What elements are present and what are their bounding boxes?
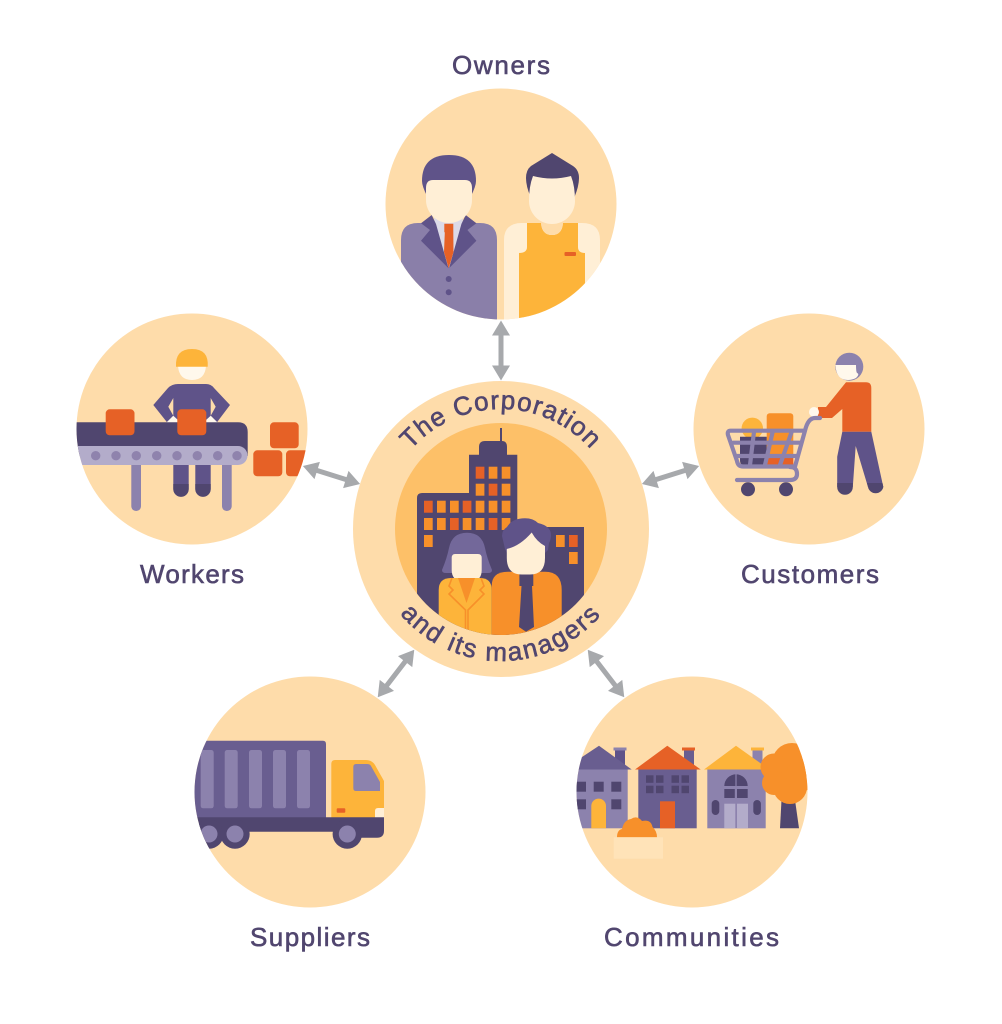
icon: two owners — [401, 153, 600, 325]
panel: customers — [694, 314, 924, 589]
curved heading: and its managers: and its managers — [402, 607, 599, 662]
panel: owners — [386, 50, 616, 325]
curved heading: The Corporation: The Corporation — [398, 394, 598, 448]
icon: office buildings and managers — [417, 428, 584, 640]
label: Communities: Communities — [604, 922, 779, 952]
arrow: suppliers to corporation — [371, 644, 421, 703]
panel: workers — [70, 314, 315, 589]
arrow: workers to corporation — [300, 457, 363, 493]
icon: shopper with cart — [728, 353, 883, 496]
arrow: owners to corporation — [492, 320, 510, 380]
arrow: communities to corporation — [581, 644, 631, 703]
icon: worker at conveyor belt — [70, 349, 315, 511]
label: Suppliers: Suppliers — [250, 922, 370, 952]
icon: delivery truck — [190, 741, 384, 849]
inner circle backdrop — [395, 423, 607, 635]
icon: neighbourhood houses — [570, 743, 818, 859]
label: Owners: Owners — [452, 50, 550, 80]
panel: the corporation and its managers — [353, 381, 649, 677]
panel: suppliers — [190, 676, 426, 952]
label: Workers: Workers — [140, 559, 244, 589]
label: Customers: Customers — [741, 559, 879, 589]
arrow: customers to corporation — [639, 457, 702, 493]
panel: communities — [570, 676, 818, 952]
